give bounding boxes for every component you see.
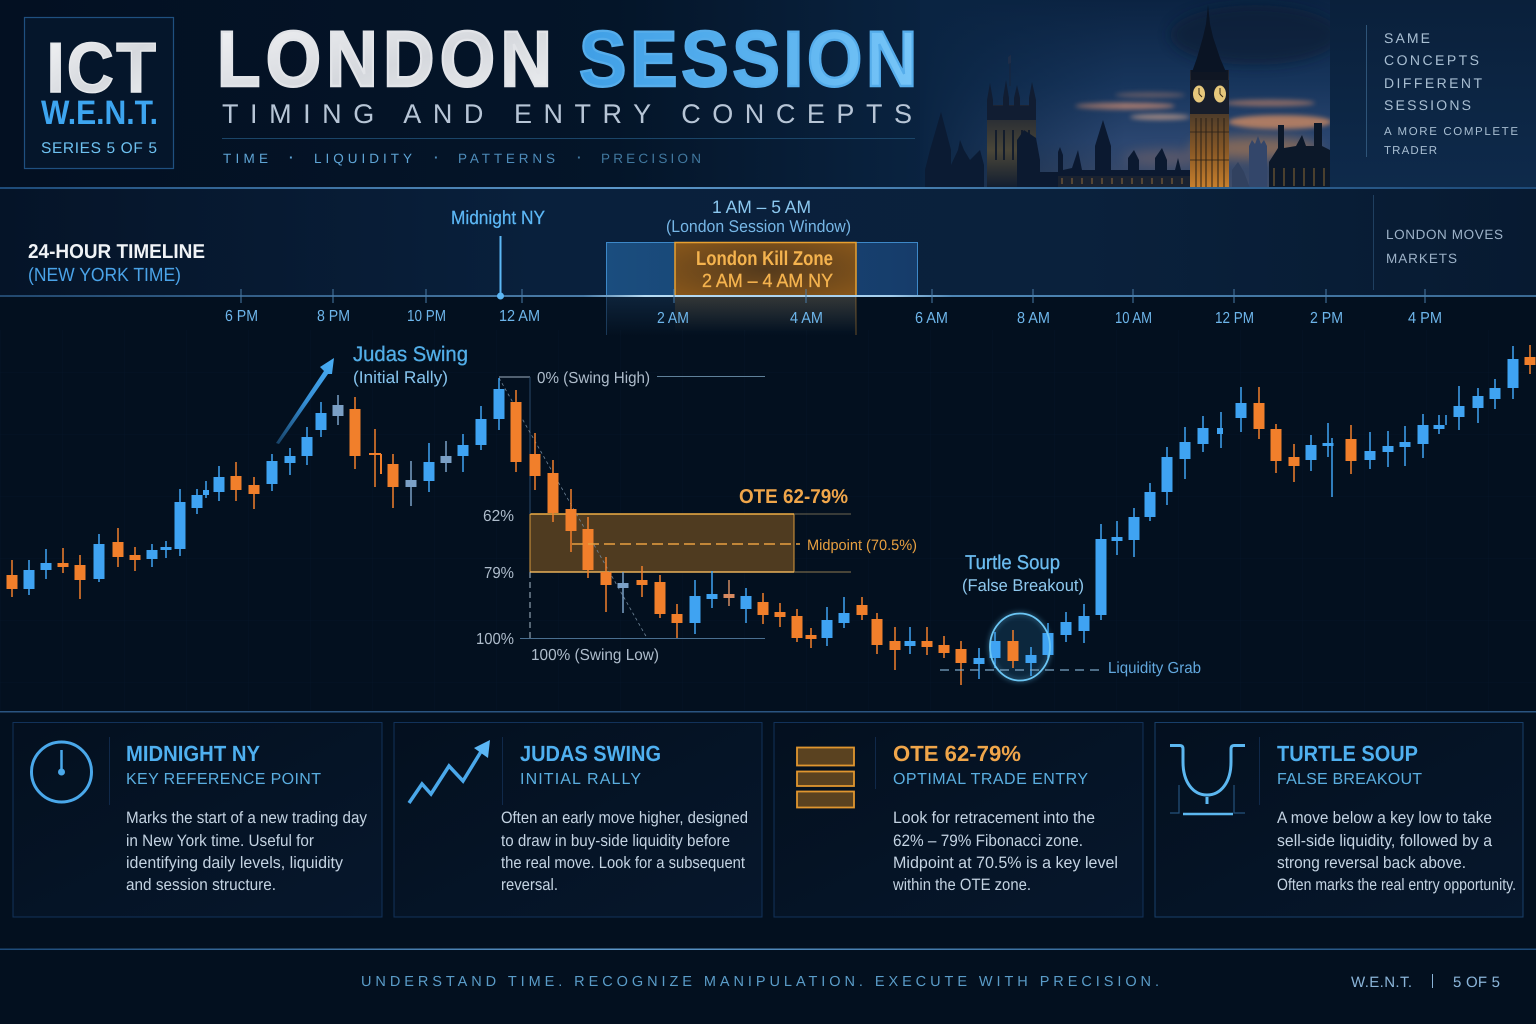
badge: ICT: ICT — [46, 29, 156, 108]
OTE labels: Midpoint (70.5%) — [807, 537, 917, 554]
side note: same concepts: TRADER — [1384, 145, 1437, 157]
panel: Midnight NY: MIDNIGHT NY — [126, 741, 260, 766]
Fibonacci labels: 79% — [484, 565, 514, 582]
midnight marker: Midnight NY — [451, 208, 545, 229]
side note: London moves markets — [1374, 195, 1503, 290]
panel: Turtle Soup — [1155, 722, 1523, 917]
panel: Midnight NY: KEY REFERENCE POINT — [126, 771, 321, 788]
text block: OTE — [892, 809, 1118, 894]
Fibonacci labels — [476, 370, 659, 664]
Turtle Soup circle — [990, 614, 1050, 680]
neutral candles — [338, 395, 729, 613]
text block: Turtle Soup: A move below a key low to take — [1277, 809, 1492, 827]
badge: series number: SERIES 5 OF 5 — [41, 140, 157, 157]
panel: OTE 62-79%: OPTIMAL TRADE ENTRY — [893, 771, 1088, 788]
bearish candles — [12, 345, 1530, 685]
text block: Judas Swing — [501, 809, 748, 894]
header tags: · — [289, 150, 294, 165]
time axis: 2 PM — [1310, 310, 1343, 327]
title — [217, 14, 917, 103]
Houses of Parliament — [1040, 120, 1190, 188]
time axis: 2 AM — [657, 310, 689, 327]
footer series mark — [1351, 974, 1500, 991]
London skyline illustration — [920, 0, 1340, 188]
Big Ben — [1190, 5, 1229, 188]
timeline band — [0, 187, 1536, 296]
panel: Midnight NY — [13, 722, 382, 917]
header tags: · — [434, 150, 438, 165]
text block: Midnight NY: and session structure. — [126, 876, 276, 894]
timeline heading — [28, 241, 205, 286]
London kill zone: London Kill Zone — [696, 248, 833, 270]
OTE labels: OTE 62-79% — [739, 486, 848, 508]
header tags: LIQUIDITY — [314, 151, 412, 166]
London kill zone: 2 AM – 4 AM NY — [702, 271, 833, 292]
text block: Turtle Soup: sell-side liquidity, followed by a — [1277, 832, 1493, 850]
icon: U-shaped false breakout — [1170, 746, 1245, 814]
text block: OTE: Look for retracement into the — [893, 809, 1095, 827]
panel: Judas Swing: INITIAL RALLY — [520, 771, 641, 788]
Victoria Tower — [987, 55, 1040, 188]
side note: same concepts: CONCEPTS — [1384, 52, 1479, 68]
side note: London moves markets: LONDON MOVES — [1386, 227, 1503, 242]
Fibonacci lines — [499, 376, 765, 638]
time axis: 12 AM — [499, 308, 540, 325]
time axis: 10 AM — [1115, 310, 1152, 327]
right side panel — [1330, 0, 1536, 188]
time axis: 10 PM — [407, 308, 446, 325]
Fibonacci labels: 0% (Swing High) — [537, 370, 650, 387]
Fibonacci labels: 62% — [483, 508, 514, 525]
Turtle Soup label — [962, 552, 1084, 595]
London kill zone — [675, 242, 856, 296]
London session window — [606, 197, 918, 336]
time axis — [0, 289, 1536, 327]
title: SESSION — [579, 14, 917, 103]
Fibonacci labels: 100% — [476, 631, 514, 648]
midnight marker — [451, 208, 545, 300]
side note: same concepts: A MORE COMPLETE — [1384, 126, 1518, 138]
icon: clock — [32, 742, 92, 802]
series badge — [24, 18, 174, 168]
Judas swing label: Judas Swing — [353, 343, 468, 366]
midpoint dashed line — [572, 543, 800, 545]
text block: Turtle Soup: strong reversal back above. — [1277, 854, 1466, 872]
OTE zone — [530, 514, 851, 572]
header tags: PRECISION — [601, 151, 701, 166]
text block: Judas Swing: Often an early move higher, designed — [501, 809, 748, 827]
header tags: PATTERNS — [458, 151, 555, 166]
panel: OTE 62-79%: OTE 62-79% — [893, 741, 1021, 766]
text block: Midnight NY — [126, 809, 368, 894]
London session window: 1 AM – 5 AM — [712, 197, 811, 217]
header tags: · — [577, 150, 582, 165]
Judas swing arrow — [276, 358, 334, 444]
footer tagline: UNDERSTAND TIME. RECOGNIZE MANIPULATION. EXECUTE WITH PRECISION. — [361, 974, 1159, 990]
side note: London moves markets: MARKETS — [1386, 251, 1457, 266]
panel: Judas Swing: JUDAS SWING — [520, 741, 661, 766]
Turtle Soup label: (False Breakout) — [962, 576, 1084, 595]
text block: OTE: Midpoint at 70.5% is a key level — [893, 854, 1118, 872]
time axis: 8 PM — [317, 308, 350, 325]
bullish candles — [29, 346, 1513, 679]
far-left towers — [925, 112, 984, 188]
time axis: 4 AM — [790, 310, 823, 327]
text block: Judas Swing: reversal. — [501, 876, 558, 894]
Turtle Soup glow — [990, 614, 1050, 680]
Judas swing label: (Initial Rally) — [353, 368, 448, 387]
panel: Turtle Soup: FALSE BREAKOUT — [1277, 771, 1422, 788]
side note: same concepts: SAME — [1384, 30, 1430, 46]
timeline heading: 24-HOUR TIMELINE — [28, 241, 205, 263]
side note: same concepts — [1366, 25, 1518, 157]
time axis: 8 AM — [1017, 310, 1050, 327]
text block: OTE: 62% – 79% Fibonacci zone. — [893, 832, 1083, 850]
London session window: (London Session Window) — [666, 217, 851, 236]
side note: same concepts: DIFFERENT — [1384, 75, 1482, 91]
liquidity grab: Liquidity Grab — [1108, 660, 1201, 677]
footer series mark: 5 OF 5 — [1453, 974, 1500, 991]
time axis: 6 AM — [915, 310, 948, 327]
Fibonacci labels: 100% (Swing Low) — [531, 647, 659, 664]
title: LONDON — [217, 14, 552, 103]
Judas swing label — [353, 343, 468, 387]
footer series mark: W.E.N.T. — [1351, 974, 1412, 991]
Turtle Soup label: Turtle Soup — [965, 552, 1060, 574]
subtitle: TIMING AND ENTRY CONCEPTS — [222, 99, 912, 129]
time axis: 12 PM — [1215, 310, 1254, 327]
time axis: 4 PM — [1408, 310, 1442, 327]
text block: Midnight NY: in New York time. Useful for — [126, 832, 314, 850]
right-hand towers and palace — [1249, 136, 1267, 188]
timeline heading: (NEW YORK TIME) — [28, 265, 181, 286]
OTE labels — [739, 486, 917, 554]
header tags — [223, 150, 701, 166]
header tags: TIME — [223, 151, 268, 166]
icon: rising arrow — [409, 740, 490, 803]
panel: Judas Swing — [394, 722, 762, 917]
candlestick chart — [12, 345, 1530, 685]
text block: Midnight NY: identifying daily levels, liquidity — [126, 854, 344, 872]
text block: Midnight NY: Marks the start of a new trading day — [126, 809, 368, 827]
text block: Judas Swing: to draw in buy-side liquidity before — [501, 832, 730, 850]
side note: same concepts: SESSIONS — [1384, 97, 1471, 113]
time axis: 6 PM — [225, 308, 258, 325]
header banner — [0, 0, 1536, 188]
text block: Turtle Soup — [1277, 809, 1516, 894]
text block: Judas Swing: the real move. Look for a subsequent — [501, 854, 745, 872]
panel: Turtle Soup: TURTLE SOUP — [1277, 741, 1418, 766]
icon: stacked zones — [797, 748, 854, 808]
panel: OTE 62-79% — [774, 722, 1143, 917]
text block: OTE: within the OTE zone. — [892, 876, 1031, 894]
badge: W.E.N.T.: W.E.N.T. — [41, 94, 158, 132]
